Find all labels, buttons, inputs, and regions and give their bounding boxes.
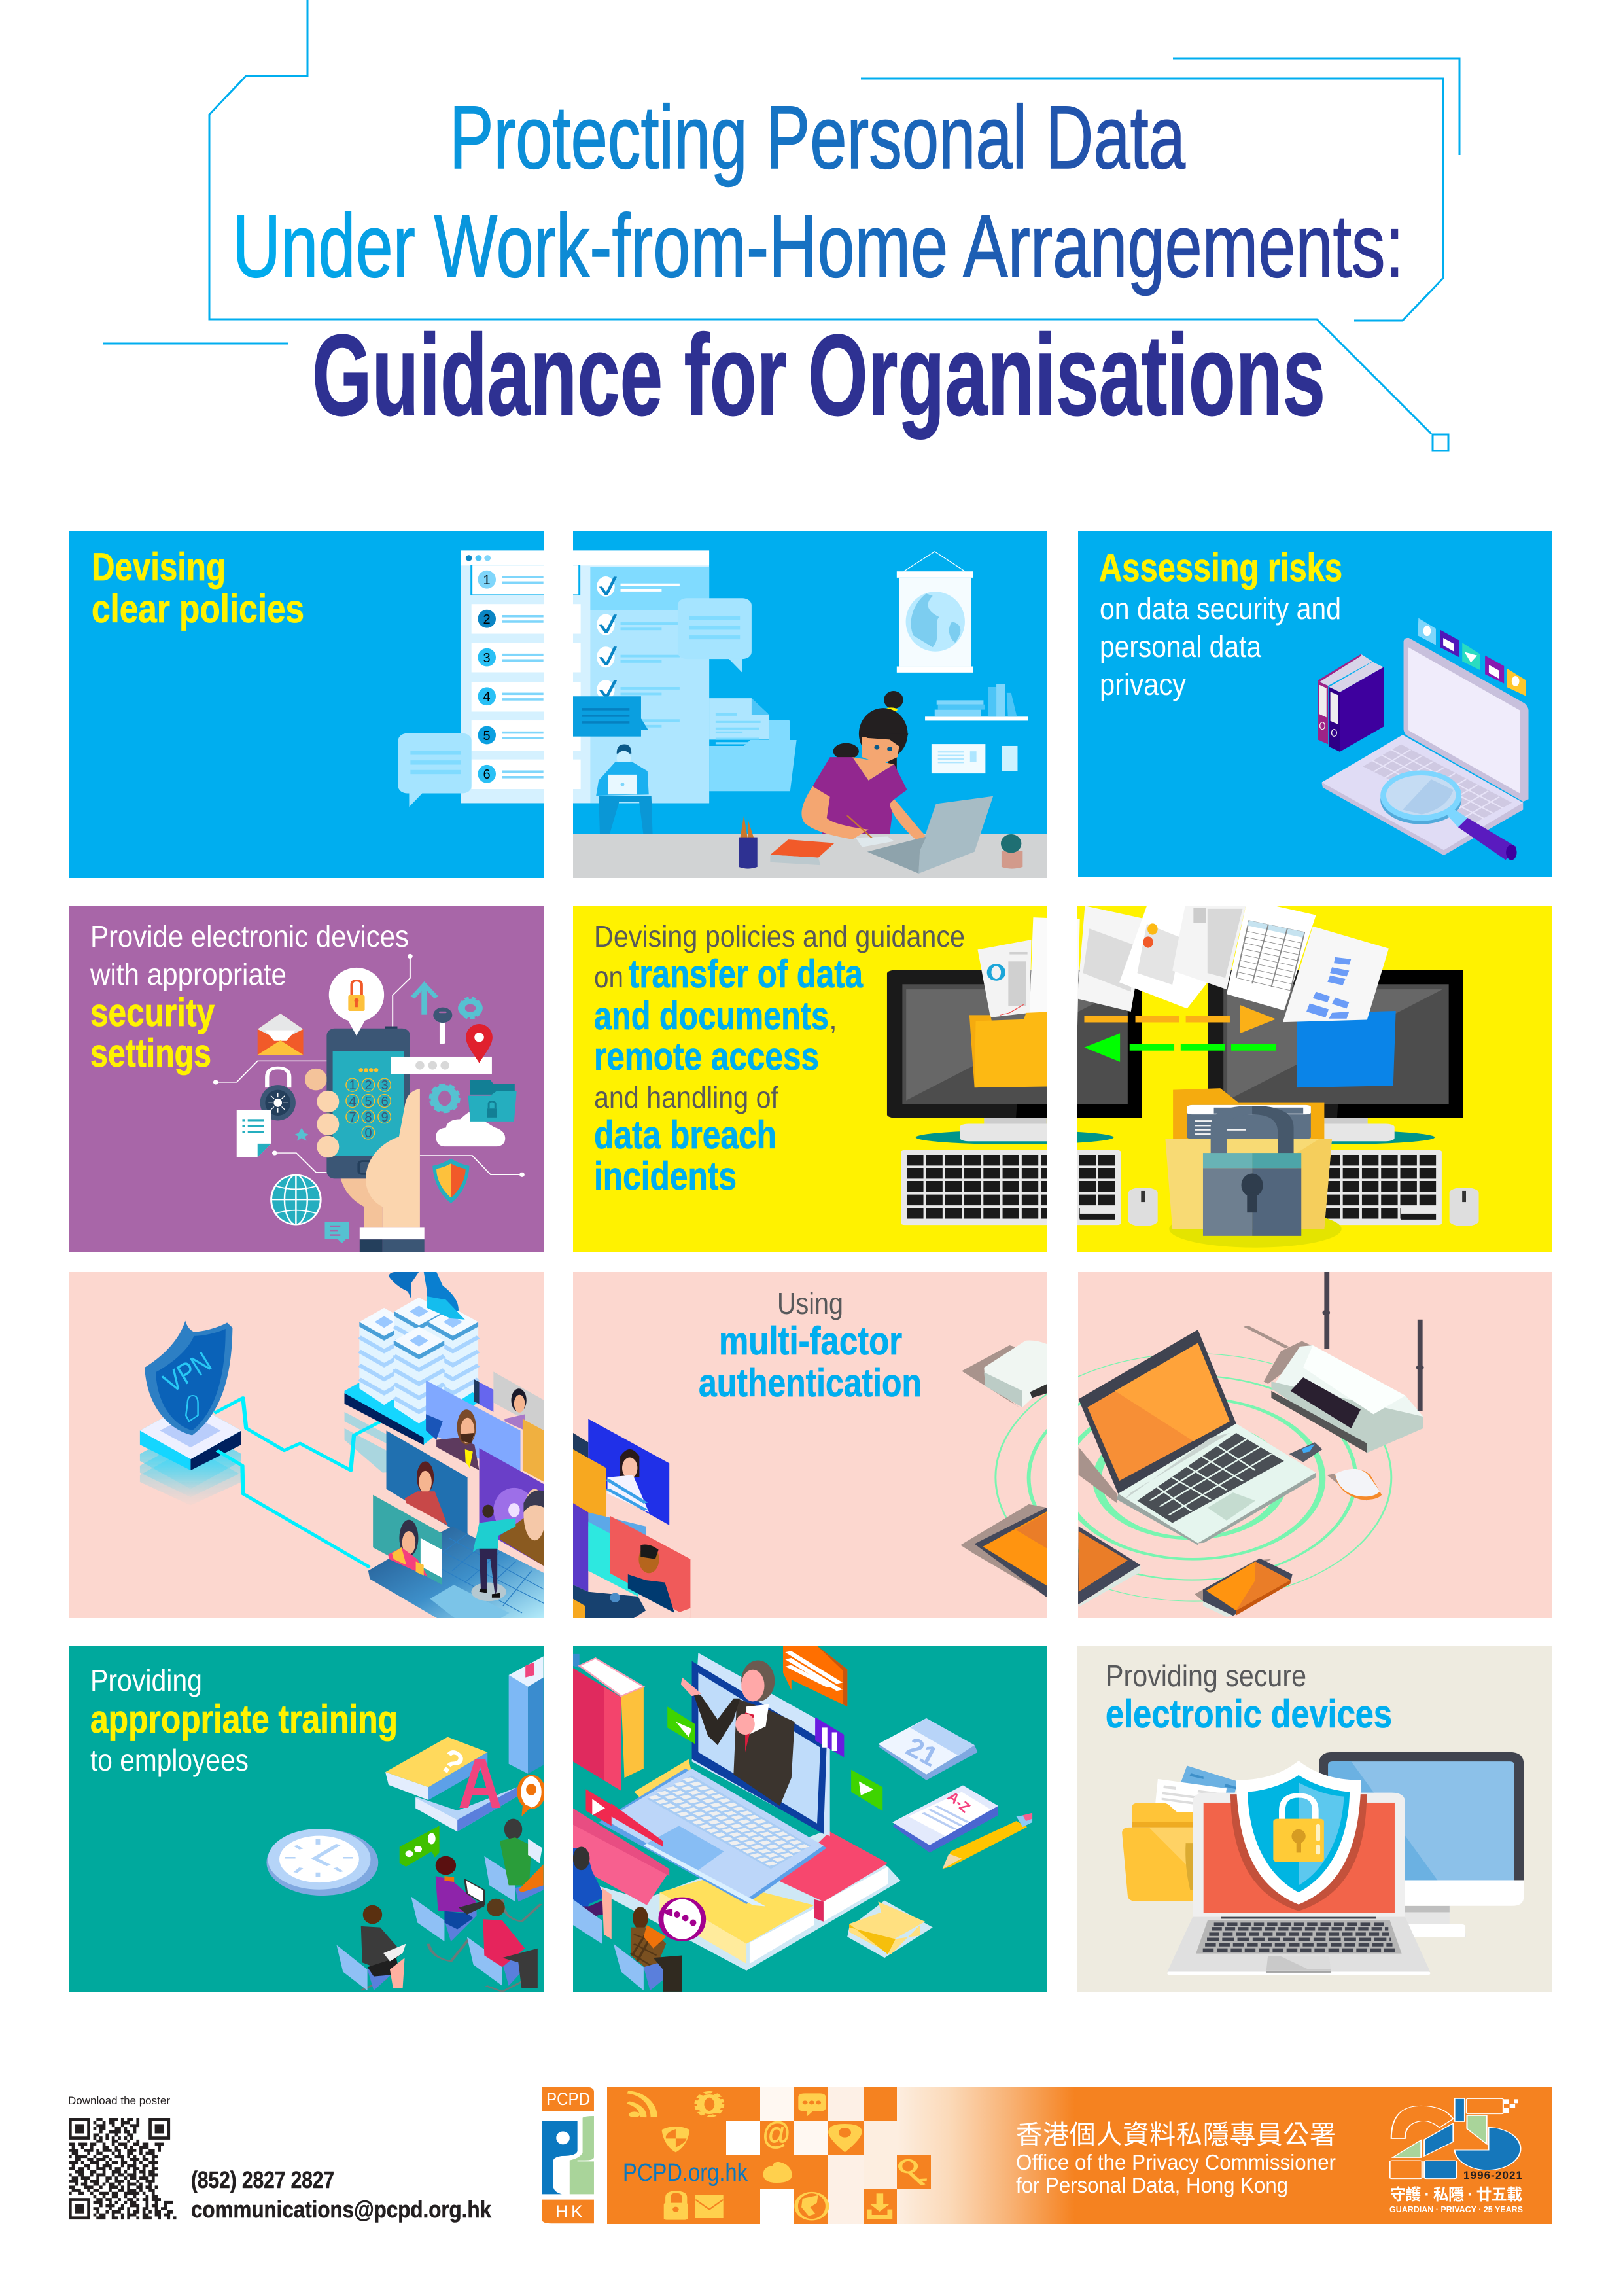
heading: Devising — [92, 545, 226, 589]
heading and text: personal data — [1100, 629, 1261, 663]
heading and text: Assessing risks — [1099, 546, 1342, 590]
keypad digits: 3 — [381, 1078, 389, 1093]
heading and text: Providing secure — [1106, 1659, 1306, 1693]
heading: clear policies — [92, 587, 304, 631]
title line 1: Protecting Personal Data — [449, 88, 1186, 188]
letter A on book: A — [458, 1744, 502, 1823]
heading and text — [1106, 1659, 1392, 1736]
keypad digits: 4 — [349, 1095, 357, 1109]
heading and text: Provide electronic devices — [90, 919, 409, 953]
panel: providing secure electronic devices — [1077, 1646, 1552, 1992]
heading and text — [90, 1663, 398, 1777]
website address: PCPD.org.hk — [623, 2159, 748, 2187]
illustration: VPN shield, servers, video calls — [140, 1272, 546, 1619]
heading and text: settings — [90, 1031, 211, 1075]
panel: appropriate training — [69, 1646, 544, 1992]
panel: multi-factor authentication — [573, 1272, 1047, 1618]
heading and text: Devising policies and guidance — [594, 919, 965, 953]
heading and text: privacy — [1100, 667, 1186, 701]
question mark on book: ? — [433, 1741, 470, 1784]
heading and text: data breach — [594, 1113, 777, 1157]
panel: connected devices — [1078, 1272, 1552, 1618]
panel: checklist and woman at desk illustration — [573, 531, 1047, 878]
keypad digits: 5 — [364, 1095, 372, 1109]
heading and text — [699, 1286, 922, 1405]
footer: PCPD logo — [542, 2087, 594, 2223]
keypad digits: 1 — [349, 1078, 357, 1093]
footer: PCPD banner — [607, 2087, 1552, 2224]
illustration: worker at home desk — [398, 550, 1047, 878]
25th anniversary logo: 1996-2021 — [1463, 2169, 1522, 2181]
heading and text: transfer of data — [629, 952, 864, 996]
keypad digits: 8 — [364, 1110, 372, 1125]
illustration: laptop, monitor, folder and shield — [1122, 1752, 1524, 1975]
organisation name: Office of the Privacy Commissioner — [1016, 2150, 1336, 2174]
keypad digits: 0 — [364, 1126, 372, 1140]
heading and text — [594, 919, 965, 1198]
heading — [92, 545, 304, 631]
keypad digits: 7 — [349, 1110, 357, 1125]
list numbers: 2 — [483, 612, 491, 627]
list numbers: 1 — [483, 573, 491, 588]
organisation name: 香港個人資料私隱專員公署 — [1016, 2121, 1336, 2149]
organisation name: for Personal Data, Hong Kong — [1016, 2173, 1288, 2197]
logo graphic — [542, 2087, 594, 2223]
calendar date: 21 — [901, 1731, 943, 1773]
illustration: file transfer and padlock — [887, 906, 1479, 1248]
list numbers — [483, 573, 491, 782]
heading and text: on — [594, 960, 623, 994]
checkerboard cells and gradient — [726, 2087, 1075, 2224]
QR code — [69, 2119, 177, 2218]
heading and text: and handling of — [594, 1080, 778, 1114]
logo text HK: H K — [555, 2202, 583, 2221]
banner icons — [627, 2092, 862, 2220]
illustration: hand holding phone with security icons — [213, 954, 525, 1252]
heading and text: with appropriate — [90, 957, 287, 991]
heading and text: and documents — [594, 994, 829, 1038]
heading and text: security — [90, 991, 215, 1034]
VPN label: VPN — [158, 1346, 217, 1399]
panel: computers exchanging files with padlock — [1077, 906, 1552, 1252]
heading and text: electronic devices — [1106, 1692, 1392, 1736]
illustration: video calls, router and tablet — [573, 1272, 1424, 1619]
panel: devising clear policies — [69, 531, 544, 878]
heading and text: multi-factor — [719, 1319, 902, 1363]
phone label: A-Z — [945, 1788, 973, 1816]
illustration: laptop, binders and magnifier — [1318, 618, 1529, 860]
illustration: laptop, router, phone and mouse with wireless rings — [960, 1272, 1424, 1617]
panel: VPN illustration — [69, 1272, 544, 1618]
at-sign icon: @ — [762, 2117, 791, 2151]
heading and text: , — [829, 1002, 837, 1036]
organisation name — [1016, 2121, 1336, 2197]
list numbers: 3 — [483, 651, 491, 665]
panel: electronic devices with security settings — [69, 906, 544, 1252]
illustration: numbered list window — [398, 550, 1047, 878]
heading and text: remote access — [594, 1034, 819, 1078]
keypad digits: 2 — [364, 1078, 372, 1093]
footer: contact and QR code — [68, 2094, 492, 2223]
phone number: (852) 2827 2827 — [191, 2166, 334, 2193]
panel: assessing risks — [1078, 531, 1552, 877]
heading and text: Providing — [90, 1663, 202, 1697]
25th anniversary logo: 守護 · 私隱 · 廿五載 — [1390, 2186, 1522, 2204]
logo text PCPD: PCPD — [546, 2089, 590, 2109]
heading and text: incidents — [594, 1154, 737, 1198]
heading and text: Using — [777, 1286, 843, 1320]
list numbers: 6 — [483, 768, 491, 782]
download label: Download the poster — [68, 2094, 170, 2107]
heading and text: to employees — [90, 1743, 249, 1777]
keypad digits: 6 — [381, 1095, 389, 1109]
illustration: presenter on laptop, books and icons — [266, 1646, 1032, 1992]
panel: transfer of data, remote access, breach handling — [573, 906, 1047, 1252]
heading and text: on data security and — [1100, 592, 1341, 626]
title block — [103, 0, 1460, 451]
heading and text: authentication — [699, 1361, 922, 1405]
illustration: books, clock and seated employees — [266, 1646, 1032, 1992]
panel: online training illustration — [573, 1646, 1047, 1992]
25th anniversary logo: GUARDIAN · PRIVACY · 25 YEARS — [1389, 2204, 1523, 2214]
heading and text — [90, 919, 409, 1075]
heading and text: appropriate training — [90, 1697, 398, 1741]
25th anniversary logo — [1389, 2098, 1523, 2214]
decorative speech frame — [103, 0, 1459, 451]
list numbers: 4 — [483, 690, 491, 704]
heading and text — [1099, 546, 1342, 701]
keypad digits: 9 — [381, 1110, 389, 1125]
illustration: computer and documents — [887, 906, 1479, 1248]
list numbers: 5 — [483, 729, 491, 743]
keypad digits — [349, 1078, 389, 1140]
